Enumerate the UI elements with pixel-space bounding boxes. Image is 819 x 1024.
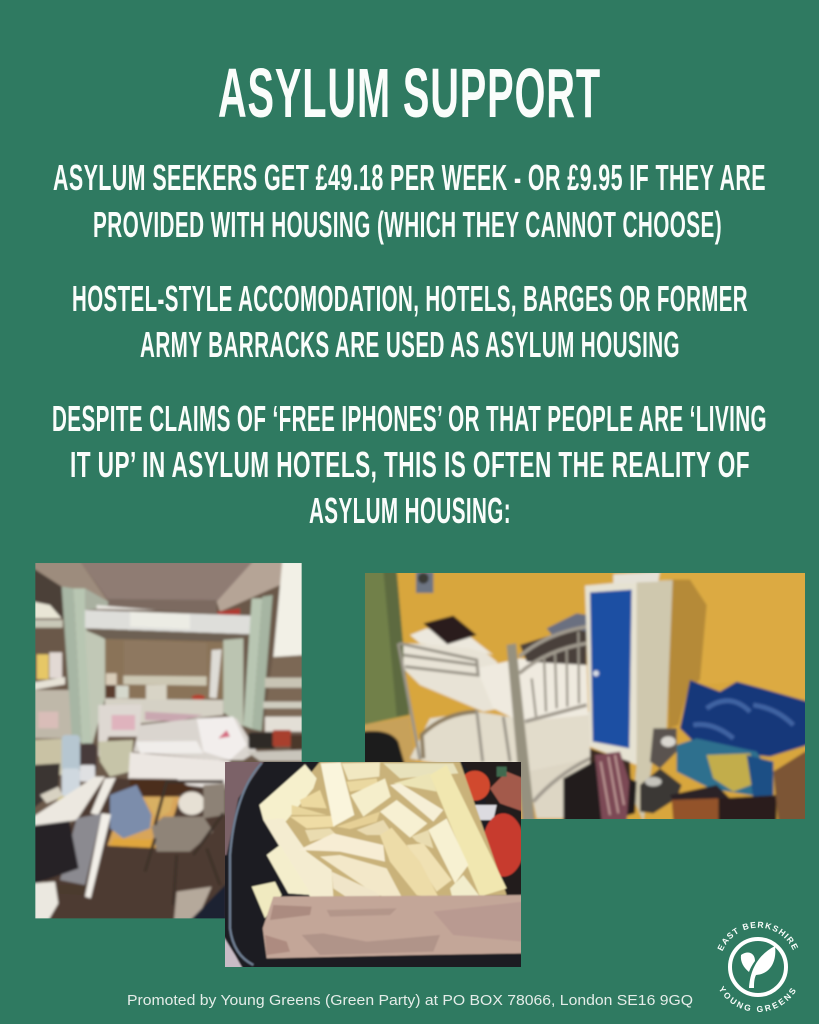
logo ring <box>730 939 786 995</box>
text block: housing types <box>72 278 748 365</box>
text block: reality <box>52 398 767 531</box>
logo sprout <box>741 946 775 988</box>
photo: bunk bed and locker room <box>363 570 808 822</box>
logo text top: EAST BERKSHIRE <box>717 922 798 951</box>
text block: weekly support <box>53 157 766 245</box>
photo: chips and meat in takeaway tray <box>223 760 524 970</box>
footer: promoted by: Promoted by Young Greens (Green Party) at PO BOX 78066, London SE16 9GQ <box>127 993 693 1009</box>
logo text bottom: YOUNG GREENS <box>720 986 796 1012</box>
text block: reality: ASYLUM HOUSING: <box>309 490 511 531</box>
logo: East Berkshire Young Greens <box>717 922 798 1012</box>
photo: cluttered room with bunk <box>33 561 304 920</box>
